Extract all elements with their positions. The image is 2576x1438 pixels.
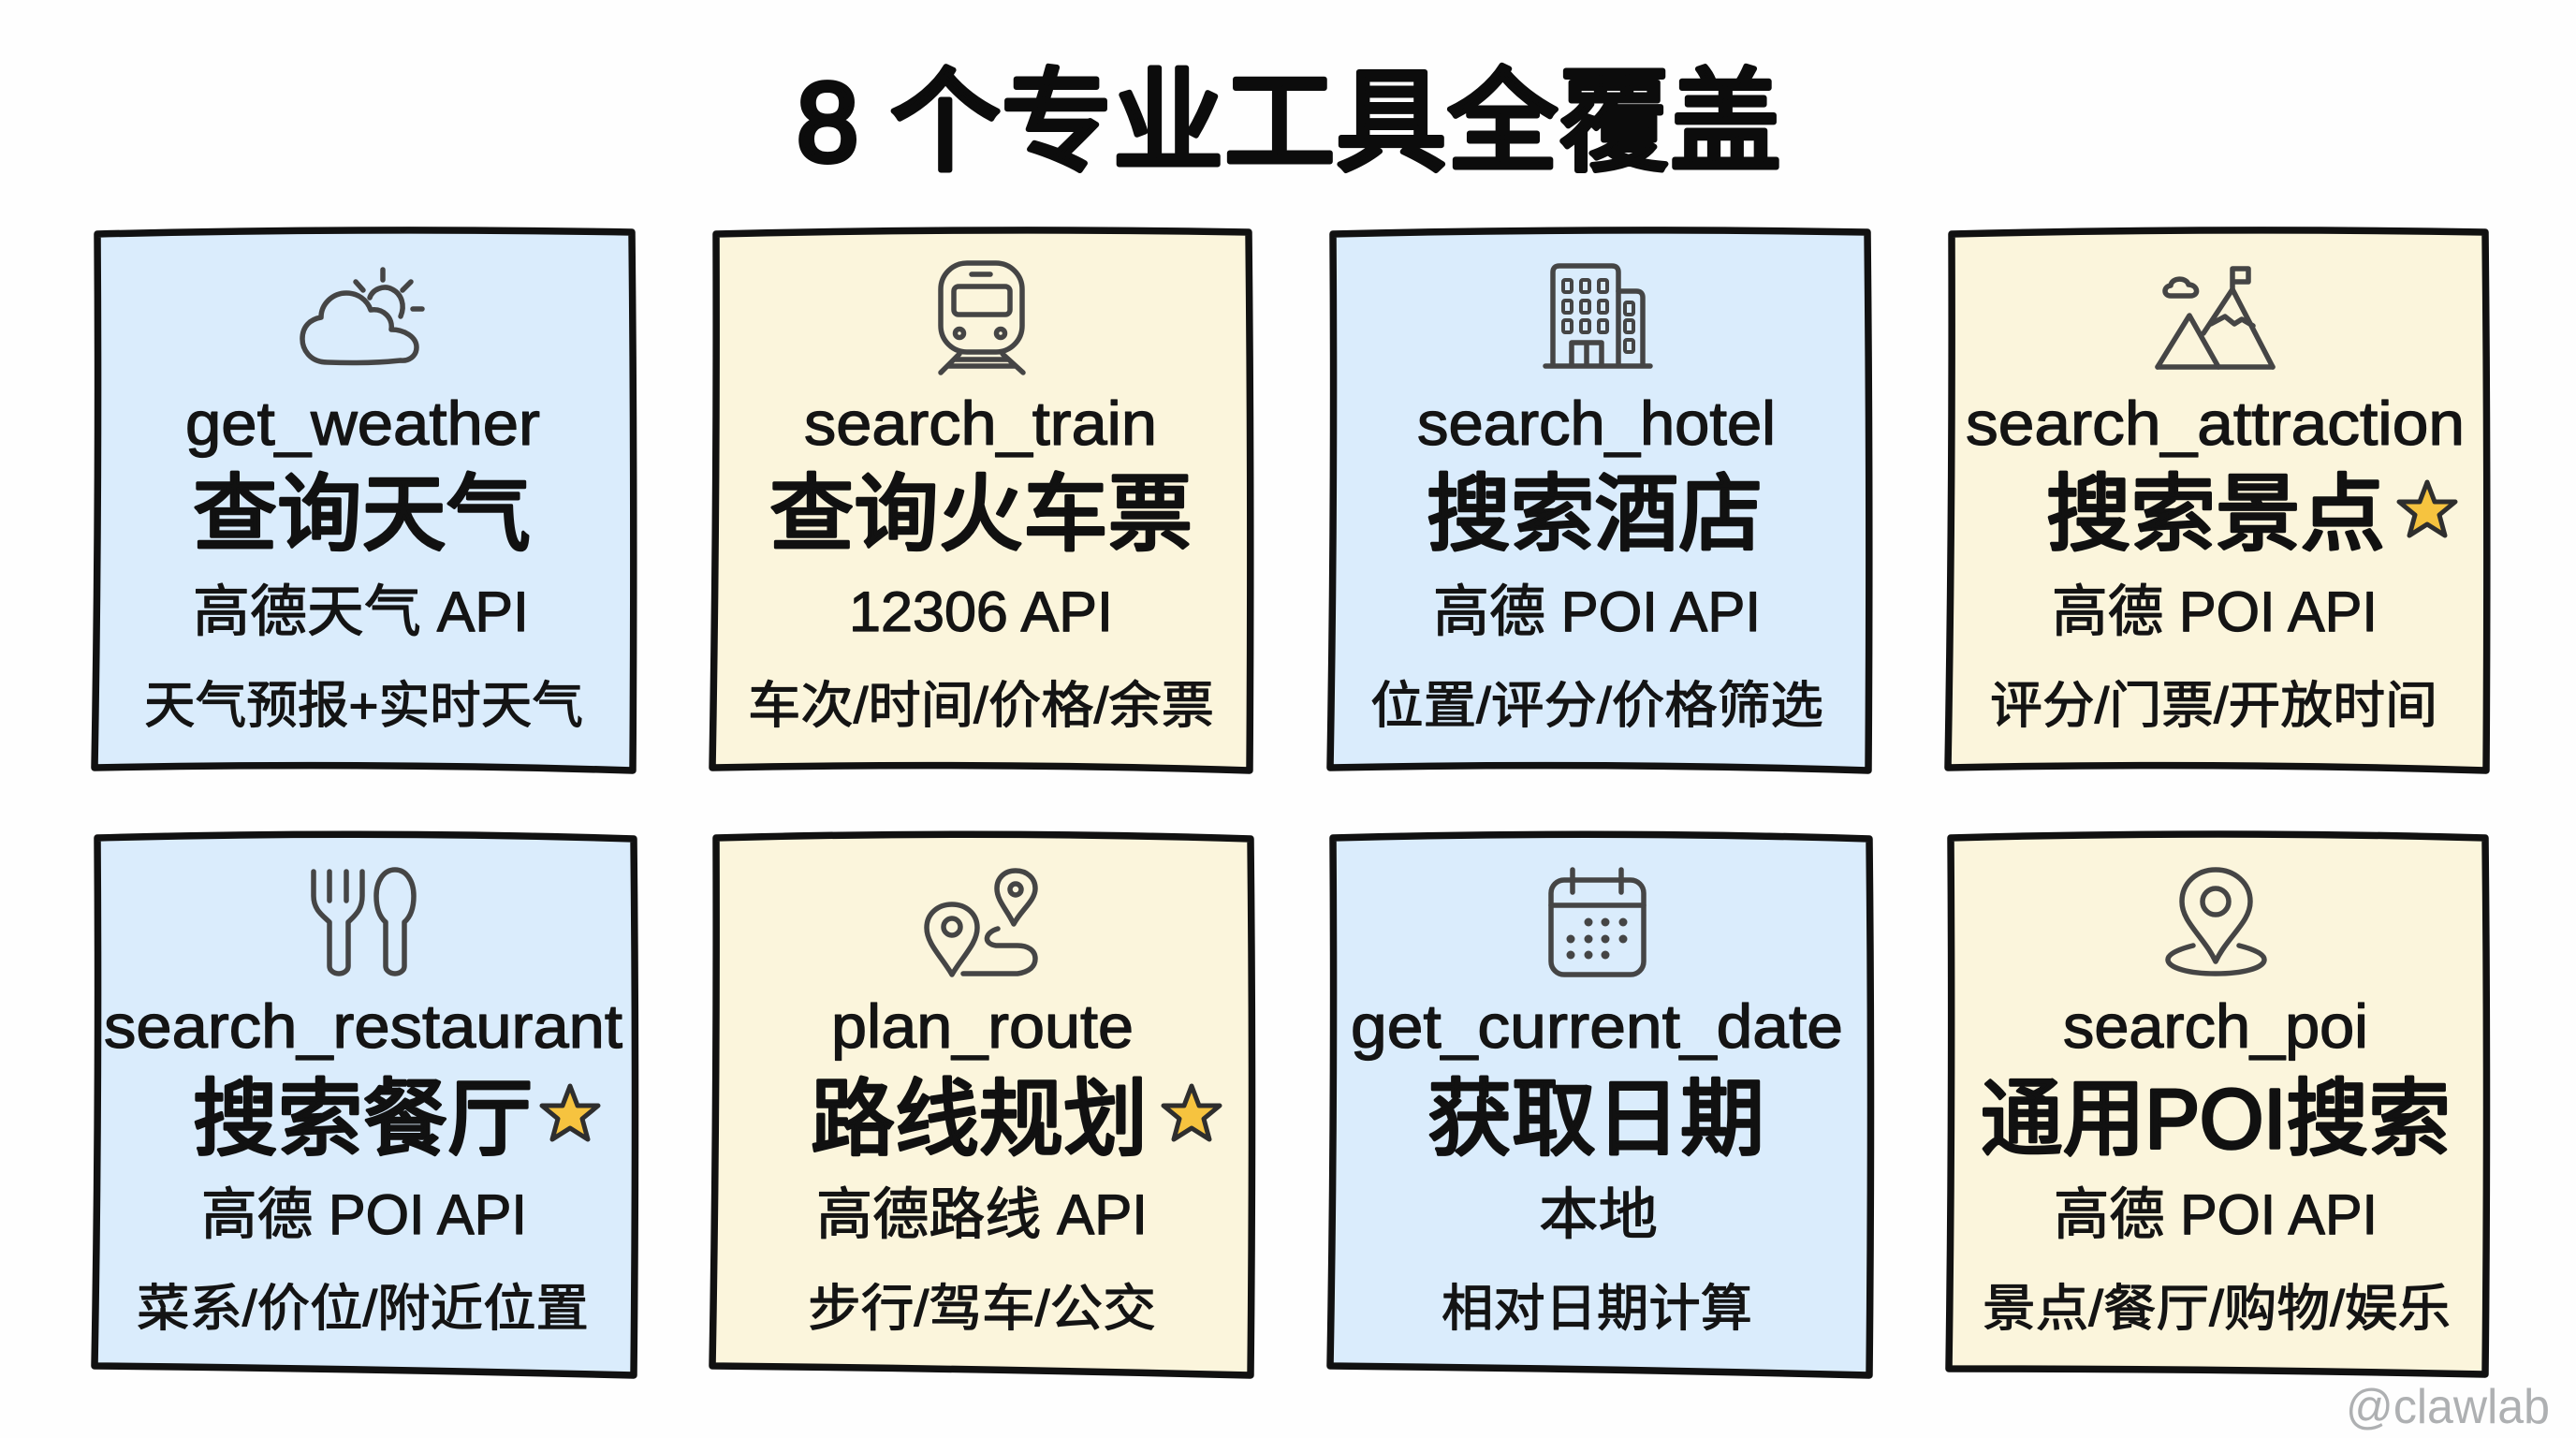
panel: plan_route [712, 834, 1252, 1375]
icon: star [2399, 482, 2455, 536]
data source: 高德 POI API [2054, 1183, 2378, 1246]
card frame [712, 834, 1252, 1375]
icon: hotel building [1545, 266, 1650, 366]
panel: search_poi [1949, 834, 2486, 1374]
tool heading: 路线规划 [811, 1073, 1148, 1167]
panel: get_current_date [1330, 834, 1870, 1375]
card frame [1330, 230, 1869, 770]
data source: 高德 POI API [1433, 580, 1761, 643]
icon: star [542, 1086, 598, 1139]
tool name: get_weather [185, 389, 540, 458]
description: 相对日期计算 [1442, 1281, 1752, 1337]
data source: 本地 [1539, 1183, 1658, 1246]
tool name: search_hotel [1417, 389, 1776, 458]
card frame [95, 230, 634, 770]
tool heading: 搜索餐厅 [193, 1073, 533, 1167]
card frame [1949, 834, 2486, 1374]
icon: route with map pins [927, 871, 1035, 975]
icon: cloud and sun [302, 270, 422, 363]
tool name: plan_route [831, 991, 1134, 1061]
panel: search_restaurant [95, 834, 635, 1375]
icon: mountain with flag [2158, 269, 2273, 367]
data source: 高德路线 API [816, 1183, 1148, 1246]
tool heading: 通用POI搜索 [1981, 1073, 2451, 1167]
data source: 12306 API [849, 580, 1113, 643]
description: 菜系/价位/附近位置 [137, 1281, 589, 1337]
panel: search_train [712, 230, 1251, 770]
panel: search_attraction [1948, 230, 2487, 770]
description: 位置/评分/价格筛选 [1370, 678, 1823, 734]
tool name: get_current_date [1351, 991, 1843, 1061]
icon: train [941, 263, 1023, 373]
description: 步行/驾车/公交 [808, 1281, 1156, 1337]
description: 车次/时间/价格/余票 [748, 678, 1214, 734]
watermark: @clawlab [2346, 1380, 2550, 1434]
data source: 高德 POI API [2052, 580, 2378, 643]
tool name: search_train [804, 389, 1157, 458]
icon: calendar [1551, 870, 1644, 975]
icon: star [1164, 1086, 1220, 1139]
icon: location pin [2168, 870, 2264, 974]
tool heading: 搜索景点 [2046, 468, 2385, 562]
tool name: search_restaurant [104, 991, 622, 1061]
description: 景点/餐厅/购物/娱乐 [1983, 1281, 2451, 1337]
icon: fork and spoon [314, 870, 414, 974]
description: 天气预报+实时天气 [144, 678, 583, 734]
tool heading: 查询天气 [193, 468, 531, 562]
title: 8 个专业工具全覆盖 [797, 60, 1781, 185]
data source: 高德 POI API [201, 1183, 527, 1246]
tool name: search_attraction [1966, 389, 2465, 458]
tool heading: 获取日期 [1427, 1073, 1764, 1167]
card frame [95, 834, 635, 1375]
tool heading: 查询火车票 [769, 468, 1193, 562]
tool heading: 搜索酒店 [1427, 468, 1763, 562]
card frame [1948, 230, 2487, 770]
panel: search_hotel [1330, 230, 1869, 770]
data source: 高德天气 API [193, 580, 529, 643]
panel: get_weather [95, 230, 634, 770]
description: 评分/门票/开放时间 [1990, 678, 2437, 734]
tool name: search_poi [2063, 991, 2368, 1061]
card frame [1330, 834, 1870, 1375]
card frame [712, 230, 1251, 770]
